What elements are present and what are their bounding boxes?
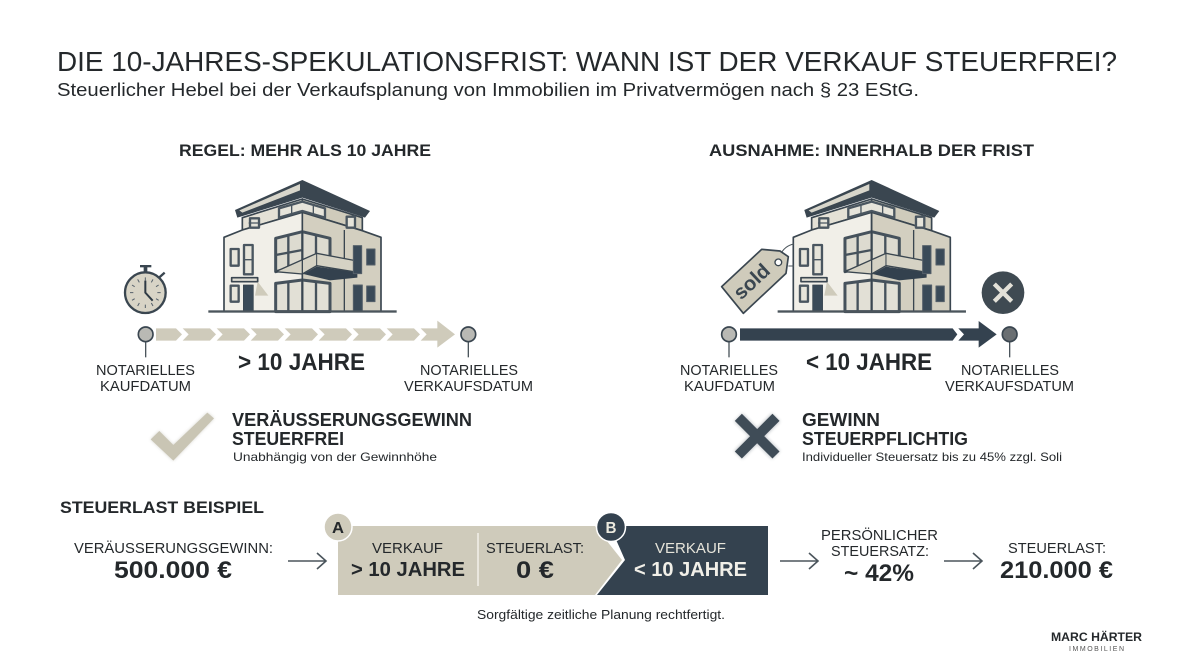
label: sale date: NOTARIELLES xyxy=(961,362,1059,379)
heading: example: STEUERLAST BEISPIEL xyxy=(60,498,264,517)
label: sale date xyxy=(404,362,533,395)
pin: sale date xyxy=(1002,327,1017,357)
tax burden result xyxy=(1000,540,1113,584)
result text: taxable: Individueller Steuersatz bis zu 45% zzgl. Soli xyxy=(802,450,1062,464)
personal tax rate: PERSÖNLICHER xyxy=(821,526,938,544)
badge B: B xyxy=(606,520,616,537)
label: sale date: VERKAUFSDATUM xyxy=(945,378,1074,395)
heading: exception: AUSNAHME: INNERHALB DER FRIST xyxy=(709,141,1035,160)
label: sale date xyxy=(945,362,1074,395)
icon: x in circle xyxy=(982,271,1024,314)
timeline arrow: less than 10 years xyxy=(740,321,997,348)
label: purchase date: NOTARIELLES xyxy=(96,362,195,379)
icon: sold tag: sold xyxy=(729,260,775,304)
personal tax rate: STEUERSATZ: xyxy=(831,543,929,560)
result text: taxable xyxy=(802,410,1062,464)
label: purchase date xyxy=(96,362,195,395)
box A: sale after more than 10 years: 0 € xyxy=(516,557,554,584)
subtitle: Steuerlicher Hebel bei der Verkaufsplanung von Immobilien im Privatvermögen nach § 23 EStG. xyxy=(57,80,919,100)
gain value: VERÄUSSERUNGSGEWINN: xyxy=(74,540,273,557)
badge B xyxy=(596,512,626,542)
arrow xyxy=(780,553,818,569)
arrow xyxy=(944,553,982,569)
label: sale date: VERKAUFSDATUM xyxy=(404,378,533,395)
icon: sold tag xyxy=(722,244,794,313)
icon: check mark xyxy=(151,413,214,461)
result text: tax free: VERÄUSSERUNGSGEWINN xyxy=(232,410,472,430)
logo: MARC HÄRTER xyxy=(1051,629,1142,644)
result text: tax free xyxy=(232,410,472,464)
label: purchase date xyxy=(680,362,778,395)
timeline arrow: more than 10 years xyxy=(156,321,455,348)
panel: tax burden example xyxy=(60,498,1113,622)
tax burden result: STEUERLAST: xyxy=(1008,540,1106,557)
panel: exception within period xyxy=(680,141,1074,464)
result text: tax free: Unabhängig von der Gewinnhöhe xyxy=(233,450,437,464)
icon: large x xyxy=(738,417,776,455)
label: purchase date: NOTARIELLES xyxy=(680,362,778,379)
gain value xyxy=(74,540,273,584)
result text: taxable: STEUERPFLICHTIG xyxy=(802,429,968,449)
label: duration: < 10 JAHRE xyxy=(806,349,932,376)
icon: stopwatch xyxy=(125,265,166,313)
heading: rule: REGEL: MEHR ALS 10 JAHRE xyxy=(179,141,431,160)
box B: sale within 10 years xyxy=(597,526,768,595)
box B: sale within 10 years: < 10 JAHRE xyxy=(634,559,747,581)
badge A xyxy=(324,513,352,541)
label: purchase date: KAUFDATUM xyxy=(684,378,775,395)
personal tax rate xyxy=(821,526,938,587)
gain value: 500.000 € xyxy=(114,557,232,584)
result text: taxable: GEWINN xyxy=(802,410,880,430)
badge A: A xyxy=(332,520,344,537)
pin: purchase date xyxy=(138,327,153,357)
box A: sale after more than 10 years: > 10 JAHRE xyxy=(351,559,465,581)
box A: sale after more than 10 years xyxy=(338,526,622,595)
pin: purchase date xyxy=(722,327,736,357)
label: duration: > 10 JAHRE xyxy=(238,349,365,376)
logo xyxy=(1051,629,1142,653)
personal tax rate: ~ 42% xyxy=(844,560,914,587)
box A: sale after more than 10 years: STEUERLAST: xyxy=(486,540,584,557)
title: DIE 10-JAHRES-SPEKULATIONSFRIST: WANN IST DER VERKAUF STEUERFREI? xyxy=(57,46,1117,77)
result text: tax free: STEUERFREI xyxy=(232,429,344,449)
label: sale date: NOTARIELLES xyxy=(420,362,518,379)
box A: sale after more than 10 years: VERKAUF xyxy=(372,540,443,557)
logo: IMMOBILIEN xyxy=(1069,646,1124,653)
box B: sale within 10 years: VERKAUF xyxy=(655,540,726,557)
pin: sale date xyxy=(461,327,476,357)
tax burden result: 210.000 € xyxy=(1000,557,1113,584)
label: purchase date: KAUFDATUM xyxy=(100,378,191,395)
panel: rule more than 10 years xyxy=(96,141,533,464)
icon: building right xyxy=(778,180,966,313)
note: Sorgfältige zeitliche Planung rechtfertigt. xyxy=(477,607,725,622)
arrow xyxy=(288,553,326,569)
icon: building left xyxy=(208,180,397,313)
